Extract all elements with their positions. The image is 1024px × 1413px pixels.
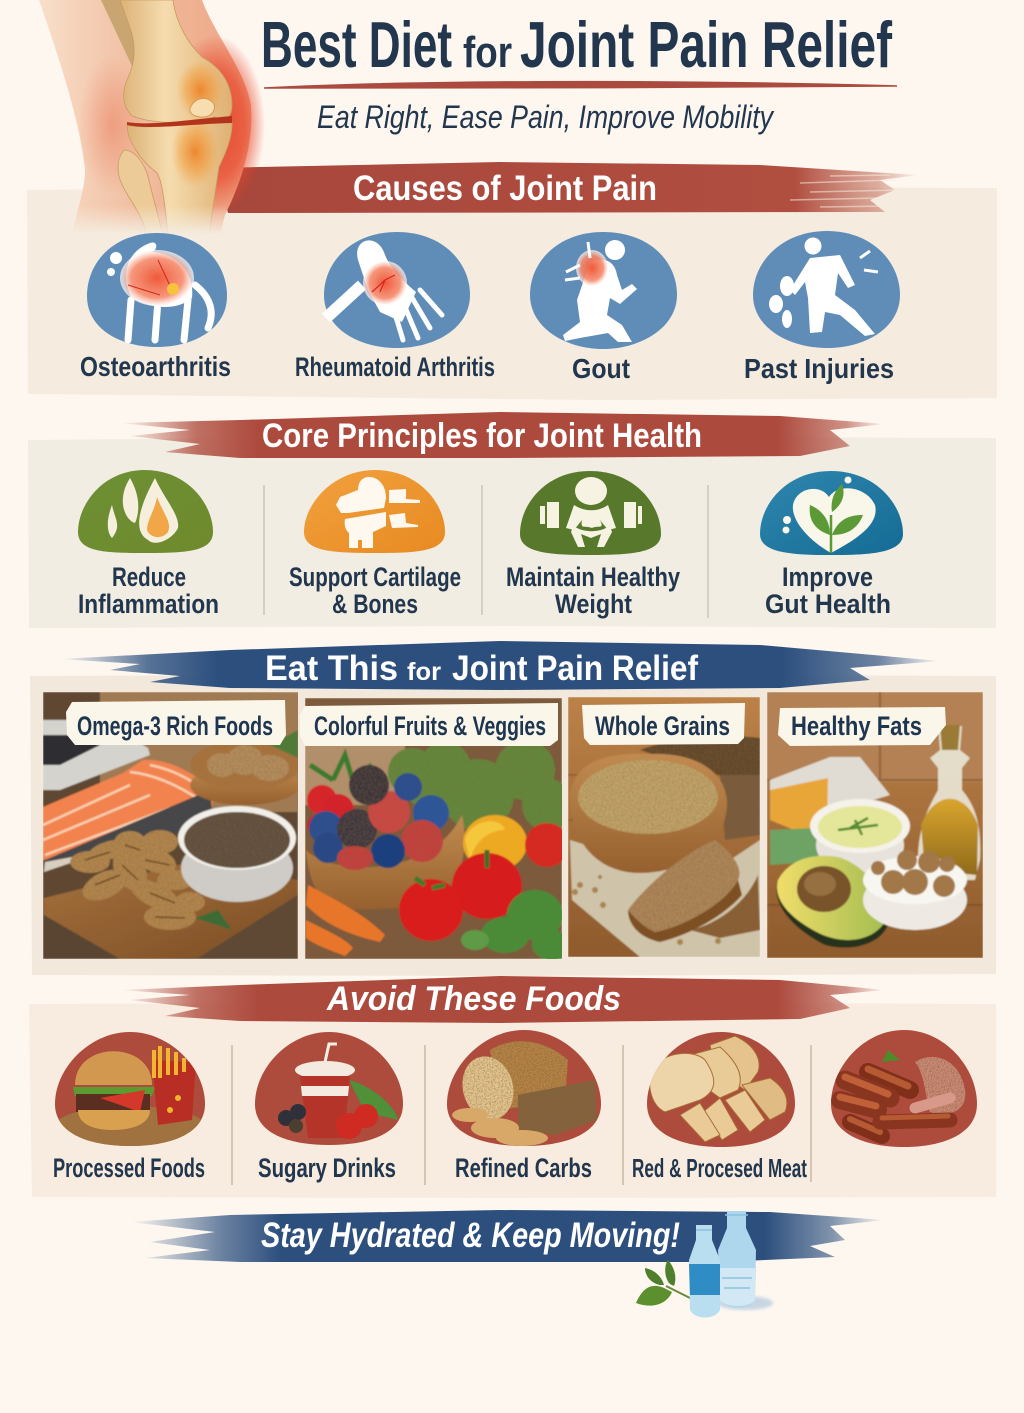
title: Best Diet [261, 8, 452, 81]
label: osteoarthritis: Osteoarthritis [80, 351, 231, 382]
panel: avoid background [29, 1002, 996, 1198]
banner: eat this: Eat This [265, 649, 398, 688]
label: reduce inflammation [78, 562, 219, 619]
panel: causes background [27, 186, 997, 400]
label: sugary drinks: Sugary Drinks [258, 1153, 396, 1183]
label pill: fruits and veggies [300, 703, 558, 746]
label: improve gut health: Gut Health [765, 589, 891, 619]
avoid: sausages [828, 1028, 980, 1150]
banner: causes of joint pain [215, 162, 918, 213]
illustration: knee joint [39, 0, 265, 235]
label: improve gut health: Improve [782, 562, 873, 592]
icon: burger and fries [55, 1032, 205, 1146]
icon: osteoarthritis [87, 233, 227, 347]
icon: weightlifter [520, 471, 661, 555]
food card: omega-3 [43, 692, 300, 959]
label pill: omega-3: Omega-3 Rich Foods [77, 711, 273, 741]
title: for [463, 28, 512, 77]
label: rheumatoid arthritis: Rheumatoid Arthritis [295, 352, 495, 382]
banner: eat this: Joint Pain Relief [452, 649, 698, 688]
photo: avocado oil nuts [767, 692, 983, 958]
label: reduce inflammation: Reduce [112, 562, 186, 592]
food card: healthy fats [767, 692, 983, 958]
cause: osteoarthritis [80, 233, 231, 382]
banner: eat this [60, 641, 940, 690]
principle: support cartilage and bones [289, 470, 461, 619]
title [261, 8, 892, 81]
photo: salmon walnuts chia [43, 692, 300, 959]
icon: gut health plant [760, 471, 903, 555]
banner: core principles: Core Principles for Joint Health [262, 417, 702, 455]
label pill: whole grains [582, 703, 745, 745]
banner: stay hydrated [130, 1210, 885, 1262]
photo: grains and bread [568, 697, 760, 957]
food card: fruits and veggies [300, 698, 574, 960]
label: support cartilage and bones [289, 562, 461, 619]
title: Joint Pain Relief [520, 8, 892, 81]
icon: rheumatoid arthritis [324, 232, 470, 348]
principle: maintain healthy weight [506, 471, 680, 619]
label: maintain healthy weight [506, 562, 680, 619]
icon: bread loaves [445, 1028, 605, 1148]
icon: past injuries [753, 231, 900, 348]
banner: stay hydrated: Stay Hydrated & Keep Moving! [261, 1216, 680, 1255]
photo: berries peppers carrots [305, 698, 574, 960]
label: gout: Gout [572, 353, 630, 384]
banner: avoid these foods [120, 976, 885, 1023]
cause: rheumatoid arthritis [295, 232, 495, 382]
label: processed foods: Processed Foods [53, 1153, 205, 1183]
banner: avoid these foods: Avoid These Foods [326, 980, 621, 1018]
label: maintain healthy weight: Maintain Healthy [506, 562, 680, 592]
food card: whole grains [568, 697, 760, 957]
icon: soda cup [255, 1032, 403, 1145]
label: reduce inflammation: Inflammation [78, 589, 219, 619]
label: support cartilage and bones: & Bones [332, 589, 418, 619]
icon: sliced bread [645, 1030, 800, 1150]
label: past injuries: Past Injuries [744, 353, 894, 384]
principle: improve gut health [760, 471, 903, 619]
label pill: whole grains: Whole Grains [595, 711, 730, 741]
icon: flames [78, 470, 213, 553]
subtitle: Eat Right, Ease Pain, Improve Mobility [317, 99, 775, 135]
label pill: omega-3 [66, 700, 286, 745]
avoid: refined carbs [445, 1028, 605, 1183]
avoid: sugary drinks [250, 1030, 410, 1183]
banner: eat this: for [407, 658, 441, 686]
avoid: processed foods [54, 1032, 205, 1178]
panel: core principles background [28, 436, 996, 628]
label: maintain healthy weight: Weight [555, 589, 632, 619]
label: support cartilage and bones: Support Cartilage [289, 562, 461, 592]
title underline [264, 82, 897, 88]
label pill: healthy fats: Healthy Fats [791, 711, 922, 741]
avoid: red and processed meat [632, 1030, 807, 1183]
cause: gout [530, 232, 677, 384]
icon: gout [530, 232, 677, 349]
principle: reduce inflammation [78, 470, 219, 619]
label pill: fruits and veggies: Colorful Fruits & Veggies [314, 711, 546, 741]
cause: past injuries [744, 231, 900, 384]
banner: causes of joint pain: Causes of Joint Pain [353, 169, 657, 208]
icon: bones [304, 470, 445, 553]
banner: core principles [120, 412, 885, 458]
label: red and processed meat: Red & Procesed Meat [632, 1153, 807, 1183]
label: improve gut health [765, 562, 891, 619]
label: refined carbs: Refined Carbs [455, 1153, 592, 1183]
panel: eat this background [30, 674, 996, 976]
icon: water bottles and leaves [636, 1211, 773, 1318]
label pill: healthy fats [778, 707, 946, 746]
